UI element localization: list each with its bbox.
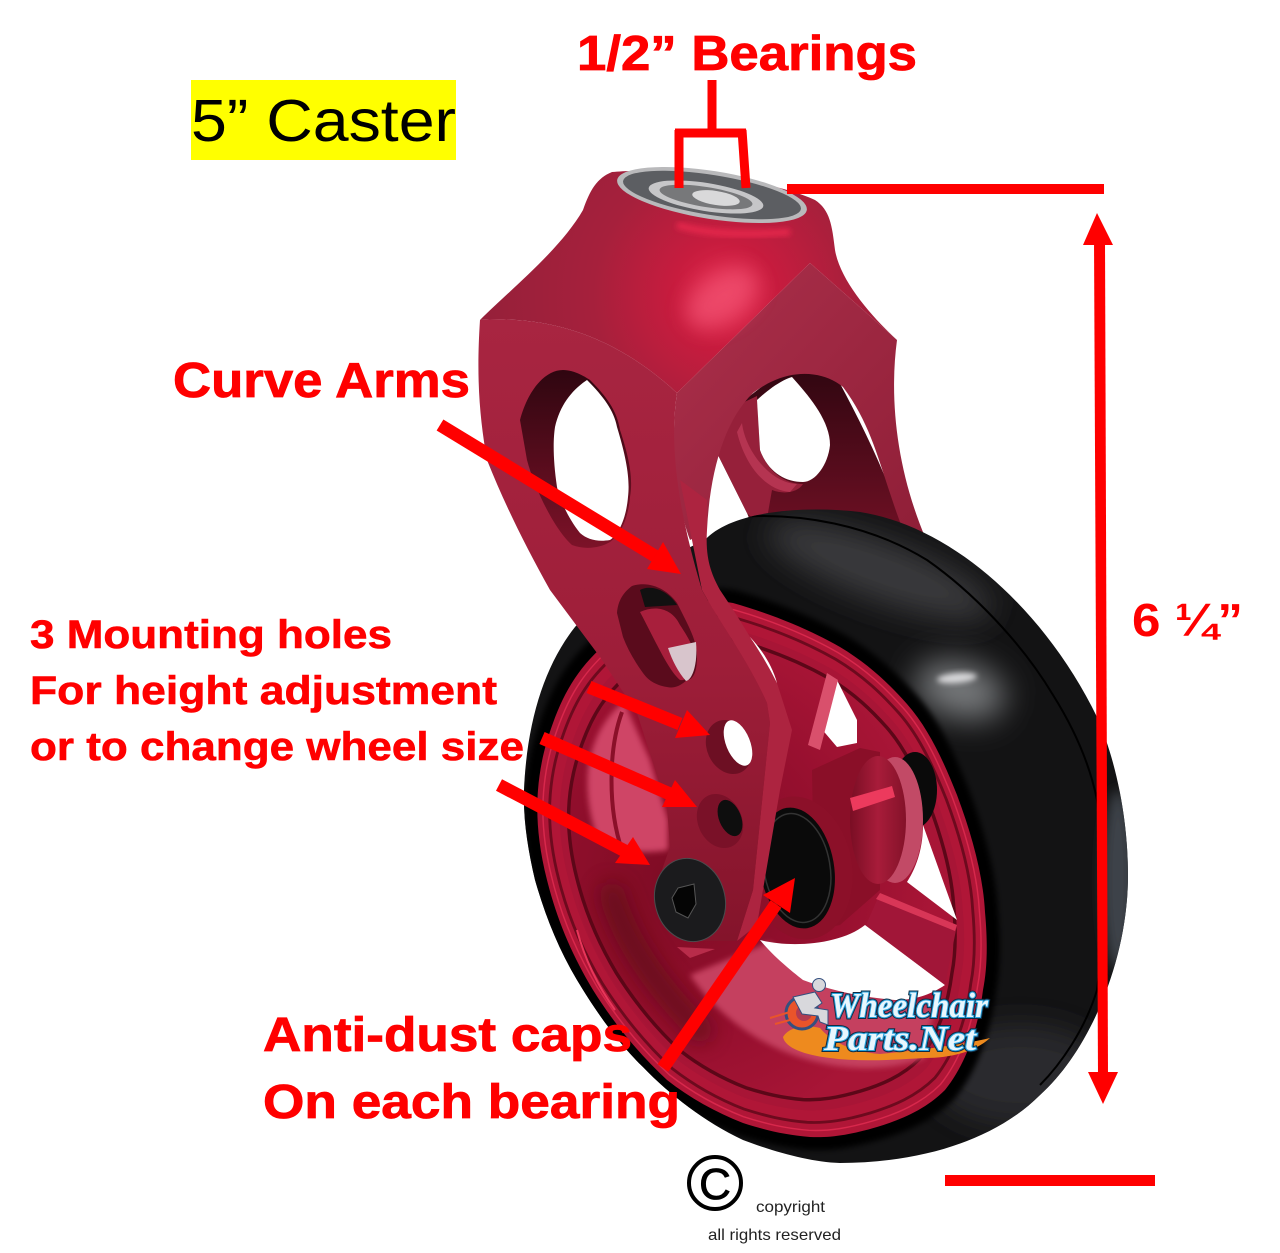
fork crown with highlight (480, 171, 897, 393)
copyright notice: copyright (756, 1199, 826, 1216)
arrow: mounting hole 3 (499, 785, 650, 865)
label: anti-dust caps: On each bearing (263, 1076, 680, 1129)
label: anti-dust caps (263, 1009, 680, 1129)
tire (510, 500, 1150, 1180)
label: mounting holes: For height adjustment (30, 669, 497, 713)
arrow: mounting hole 1 (589, 687, 710, 738)
label: anti-dust caps: Anti-dust caps (263, 1009, 632, 1062)
fork side strip (680, 480, 792, 941)
logo: WheelchairParts.Net: Parts.Net (823, 1019, 977, 1058)
arrow: anti-dust caps (663, 878, 795, 1068)
dimension arrow: height (1083, 213, 1118, 1104)
arrow: curve arms (440, 425, 681, 574)
arrow: mounting hole 2 (542, 738, 697, 807)
dimension: top line (787, 184, 1104, 194)
dimension: bottom line (945, 1175, 1155, 1186)
mounting hole 1 (697, 712, 761, 782)
rim lower pink band (690, 942, 935, 1068)
logo: WheelchairParts.Net: Wheelchair (830, 986, 988, 1025)
rim inner dark shading (612, 895, 700, 1030)
fork left plate (478, 319, 770, 941)
bolt (645, 850, 735, 950)
title: 5” Caster: 5” Caster (191, 88, 456, 154)
rim left pink lobe (587, 702, 668, 852)
label: bearings: 1/2” Bearings (577, 27, 917, 81)
copyright notice (689, 1157, 841, 1244)
label: height: 6 ¼” (1132, 594, 1243, 646)
fork rear arm (717, 365, 905, 570)
spoke windows (820, 680, 857, 747)
fork right panel (674, 263, 925, 540)
copyright notice: all rights reserved (708, 1227, 841, 1244)
spoke highlights (808, 673, 838, 750)
fork large hole (520, 370, 631, 548)
copyright notice: C (699, 1160, 731, 1209)
mounting hole 2 (688, 786, 752, 856)
logo: WheelchairParts.Net: Wheelchair (830, 986, 988, 1025)
logo: WheelchairParts.Net (770, 978, 990, 1060)
fork slot hole (617, 584, 697, 687)
caster wheel photo illustration (478, 156, 1150, 1180)
logo: WheelchairParts.Net: Parts.Net (823, 1019, 977, 1058)
bracket: bearing bore (675, 80, 746, 188)
label: mounting holes: or to change wheel size (30, 725, 524, 769)
bearing (613, 156, 811, 234)
hub (736, 748, 937, 948)
label: mounting holes (30, 613, 524, 769)
rim (537, 601, 987, 1137)
label: curve arms: Curve Arms (173, 354, 470, 408)
label: mounting holes: 3 Mounting holes (30, 613, 392, 657)
